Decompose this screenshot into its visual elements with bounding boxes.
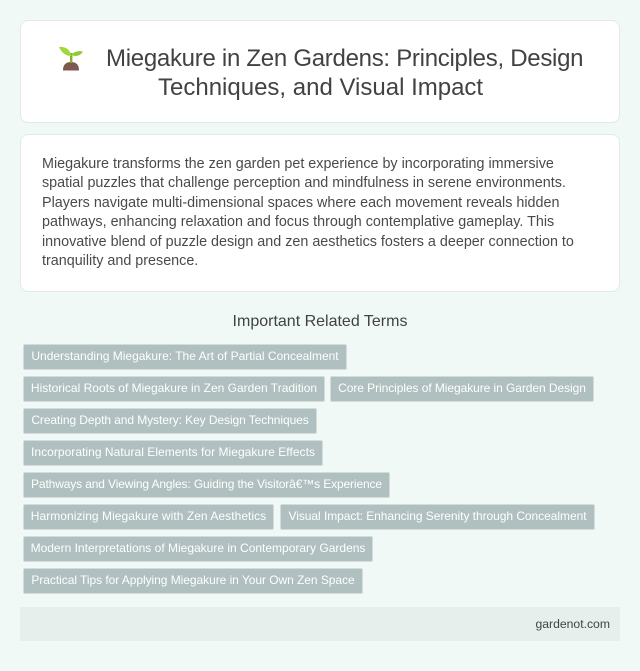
tag: Creating Depth and Mystery: Key Design Techniques: [31, 413, 309, 427]
tag: Practical Tips for Applying Miegakure in Your Own Zen Space: [31, 573, 355, 587]
tag: [23, 344, 347, 370]
description text: spatial puzzles that challenge perception and mindfulness in serene environments.: [42, 175, 566, 191]
footer text: gardenot.com: [535, 617, 610, 631]
tag: [280, 504, 595, 530]
tag: [23, 408, 317, 434]
icon: sprout: [59, 46, 83, 70]
tag: Modern Interpretations of Miegakure in Contemporary Gardens: [31, 541, 365, 555]
description text: [42, 156, 574, 269]
tag: Harmonizing Miegakure with Zen Aesthetics: [31, 509, 266, 523]
tag: [23, 440, 323, 466]
tag: Understanding Miegakure: The Art of Partial Concealment: [31, 349, 339, 363]
tag list: [23, 344, 595, 594]
tag: [330, 376, 594, 402]
footer bar: [20, 607, 620, 641]
description text: tranquility and presence.: [42, 253, 198, 269]
heading: important related terms: Important Related Terms: [233, 313, 407, 330]
tag: [23, 536, 373, 562]
tag: [23, 472, 390, 498]
title text line 2: Techniques, and Visual Impact: [158, 74, 483, 101]
description text: Miegakure transforms the zen garden pet experience by incorporating immersive: [42, 156, 554, 172]
tag: Visual Impact: Enhancing Serenity through Concealment: [288, 509, 586, 523]
panel: title card: [20, 20, 620, 123]
tag: [23, 504, 274, 530]
tag: [23, 376, 325, 402]
panel: description: [20, 134, 620, 292]
tag: [23, 568, 363, 594]
description text: innovative blend of puzzle design and zen aesthetics fosters a deeper connection to: [42, 234, 574, 250]
tag: Incorporating Natural Elements for Miegakure Effects: [31, 445, 315, 459]
tag: Pathways and Viewing Angles: Guiding the Visitorâ€™s Experience: [31, 477, 382, 491]
description text: pathways, enhancing relaxation and focus through contemplative gameplay. This: [42, 214, 554, 230]
tag: Historical Roots of Miegakure in Zen Garden Tradition: [31, 381, 317, 395]
description text: Players navigate multi-dimensional spaces where each movement reveals hidden: [42, 195, 559, 211]
tag: Core Principles of Miegakure in Garden Design: [338, 381, 586, 395]
title text: Miegakure in Zen Gardens: Principles, Design: [106, 45, 583, 72]
